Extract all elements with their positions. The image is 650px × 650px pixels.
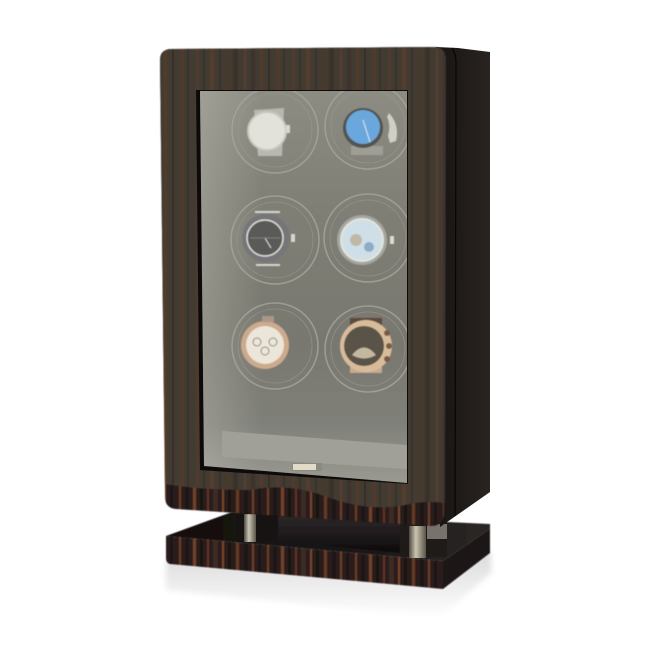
door latch (292, 463, 322, 471)
watch winders behind glass (222, 83, 412, 469)
watch: black dial chronograph (242, 211, 295, 266)
control panel strip (222, 431, 407, 469)
watch: white dial steel (248, 108, 290, 156)
watch: rose gold on brown strap (340, 318, 392, 373)
right posts (401, 520, 447, 558)
frame reflection haze (160, 47, 446, 507)
watch: rose gold chronograph (241, 316, 289, 369)
base top surface (166, 512, 490, 561)
watch: pale blue dial (337, 215, 394, 265)
base plinth (166, 512, 490, 589)
under-cabinet reflection (278, 516, 400, 553)
cabinet front frame (160, 47, 446, 526)
winder rings (231, 83, 412, 392)
base front face (166, 536, 443, 589)
base side face (443, 529, 490, 589)
left posts (236, 510, 278, 542)
glass panel (200, 91, 407, 483)
floor shadow (166, 550, 492, 618)
product photo: six-watch winder cabinet (159, 46, 493, 604)
cabinet side panel (436, 47, 490, 527)
window recess (196, 90, 408, 484)
watch: blue dial (343, 108, 397, 155)
